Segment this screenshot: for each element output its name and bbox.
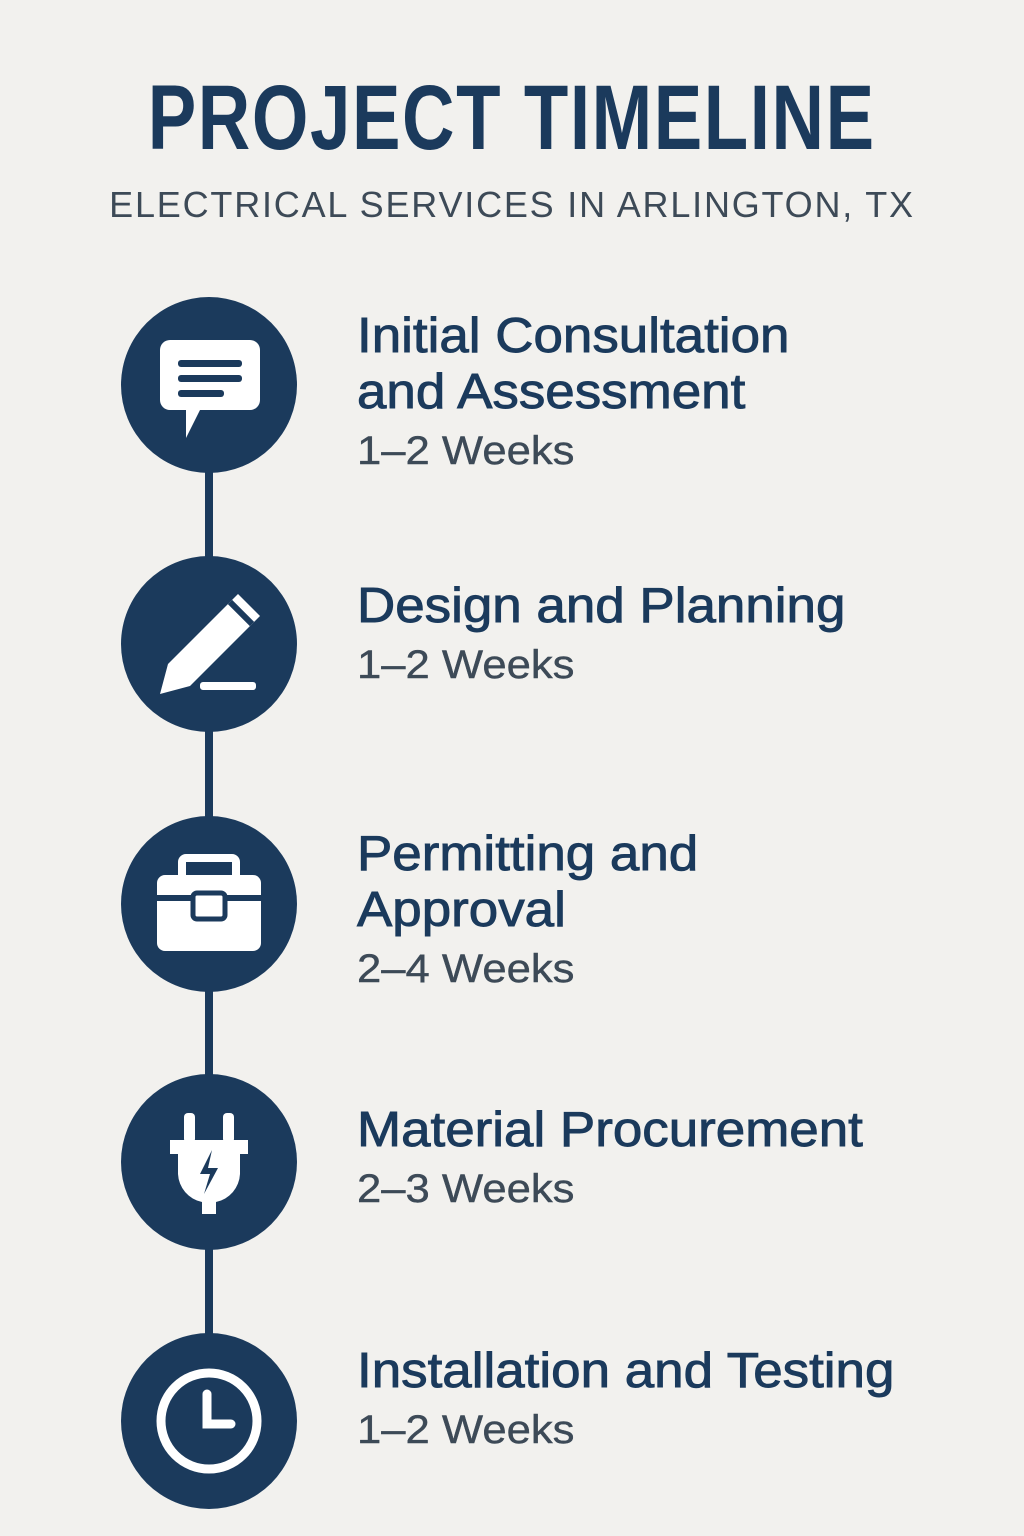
- step 4 text: [357, 1103, 863, 1211]
- icon: clock: [121, 1333, 297, 1509]
- icon: briefcase: [121, 816, 297, 992]
- icon: chat bubble: [121, 297, 297, 473]
- step 2 text: [357, 579, 845, 687]
- title: PROJECT TIMELINE: [148, 67, 876, 169]
- step 5 text: 1–2 Weeks: [357, 1408, 574, 1452]
- step 1 text: and Assessment: [357, 365, 745, 419]
- icon: plug: [121, 1074, 297, 1250]
- step 4 text: Material Procurement: [357, 1103, 863, 1157]
- step 3 text: 2–4 Weeks: [357, 947, 574, 991]
- step 3 text: Approval: [357, 883, 566, 937]
- step 1 text: Initial Consultation: [357, 309, 789, 363]
- step 2 text: 1–2 Weeks: [357, 643, 574, 687]
- step 1 text: [357, 309, 789, 473]
- connector line: [205, 385, 213, 1421]
- step 5 text: [357, 1344, 894, 1452]
- subtitle: ELECTRICAL SERVICES IN ARLINGTON, TX: [109, 184, 915, 225]
- step 3 text: [356, 827, 698, 991]
- icon: pencil: [121, 556, 297, 732]
- step 4 text: 2–3 Weeks: [357, 1167, 574, 1211]
- step 3 text: Permitting and: [357, 827, 698, 881]
- step 1 text: 1–2 Weeks: [357, 429, 574, 473]
- step 5 text: Installation and Testing: [357, 1344, 894, 1398]
- step 2 text: Design and Planning: [357, 579, 845, 633]
